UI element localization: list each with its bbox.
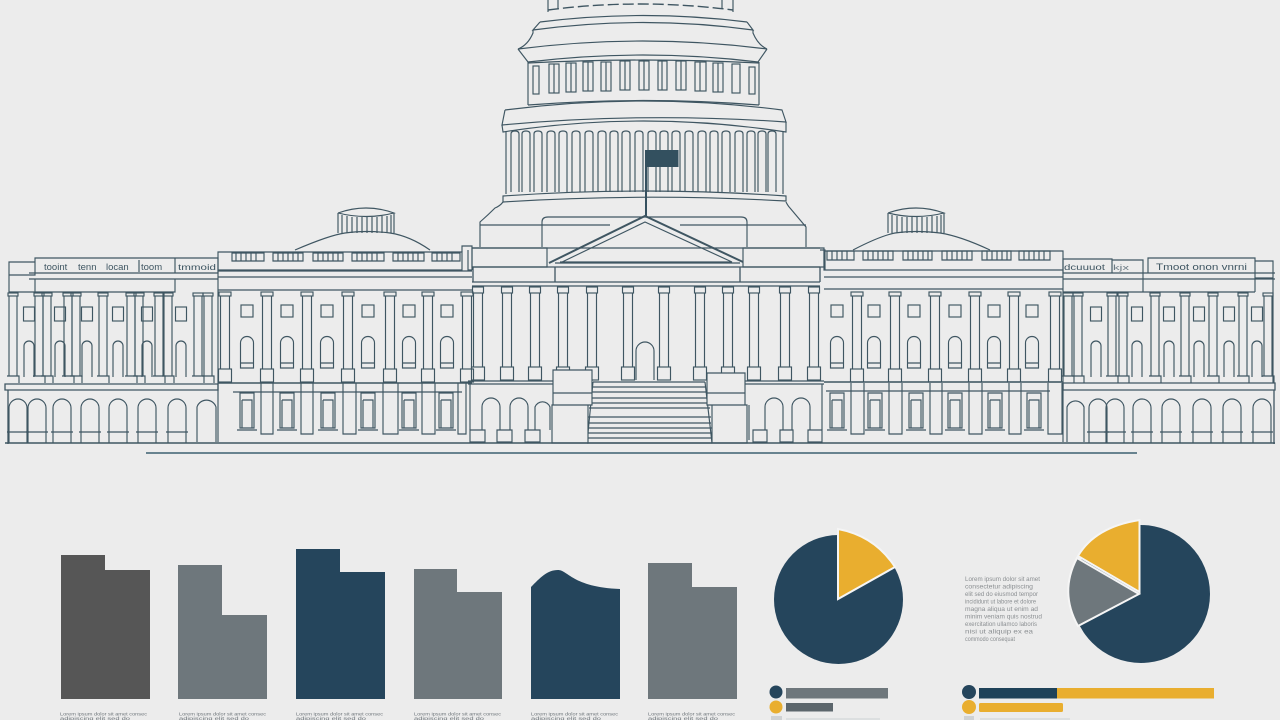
lower arches beside stairs [470, 384, 822, 442]
caption 5: Lorem ipsum dolor sit amet consec [531, 712, 619, 716]
legend row 1 [962, 685, 1214, 699]
grey slice [1068, 558, 1139, 626]
bar chart [61, 549, 737, 699]
caption 6: Lorem ipsum dolor sit amet consec [648, 712, 736, 716]
gold slice [1078, 520, 1140, 592]
dome upper tiers [518, 22, 767, 105]
right wing side inscription: dcuuuot [1064, 262, 1106, 272]
legend row 1 [770, 686, 888, 698]
right centre wing [824, 251, 1063, 442]
right pie chart [1068, 520, 1210, 663]
legend row 2 [770, 700, 833, 714]
left wing [5, 258, 218, 444]
bar 1 [61, 555, 150, 699]
left wing inscription: tooint [44, 262, 68, 273]
right wing [1062, 258, 1275, 444]
caption 3: Lorem ipsum dolor sit amet consec [296, 712, 384, 716]
dome colonnade [502, 100, 786, 194]
legend row 2 [962, 700, 1063, 714]
line 8: nisi ut aliquip ex ea [965, 630, 1034, 636]
right dome [853, 208, 990, 250]
left wing side inscription: tmmoid [178, 262, 216, 272]
line 6: minim veniam quis nostrud [965, 614, 1042, 620]
flag [646, 150, 678, 216]
left centre wing [218, 246, 474, 442]
right wing inscription: Tmoot onon vnrni [1156, 262, 1247, 272]
bar 3 [296, 549, 385, 699]
stairs [552, 370, 747, 443]
navy disc [774, 535, 903, 664]
left wing inscription: toom [141, 262, 162, 273]
caption 2: Lorem ipsum dolor sit amet consec [179, 712, 267, 716]
dome base [472, 191, 820, 248]
left legend [770, 686, 888, 720]
bar 4 [414, 569, 502, 699]
line 1: Lorem ipsum dolor sit amet [965, 577, 1040, 583]
left wing inscription: tenn [78, 262, 96, 273]
illustration: capitol building [5, 0, 1275, 453]
legend row 3 [771, 716, 880, 720]
gold slice [838, 529, 895, 599]
central portico [468, 216, 825, 384]
left wing inscription: locan [106, 262, 129, 273]
building base lines [5, 443, 1275, 453]
bar 2 [178, 565, 267, 699]
legend row 3 [964, 716, 1070, 720]
line 3: elit sed do eiusmod tempor [965, 592, 1038, 598]
bar 5 [531, 570, 620, 699]
line 7: exercitation ullamco laboris [965, 622, 1037, 628]
dome drum windows [533, 61, 755, 94]
left dome [295, 208, 430, 250]
caption 1: Lorem ipsum dolor sit amet consec [60, 712, 148, 716]
right wing small inscription: kjx [1113, 265, 1130, 272]
line 9: commodo consequat [965, 637, 1015, 643]
bar captions [60, 712, 736, 720]
centre text block [965, 577, 1042, 643]
line 4: incididunt ut labore et dolore [965, 600, 1037, 606]
line 2: consectetur adipiscing [965, 584, 1033, 590]
right legend [962, 685, 1214, 720]
navy disc [1072, 525, 1210, 663]
line 5: magna aliqua ut enim ad [965, 607, 1038, 613]
dome lantern [540, 0, 747, 22]
left pie chart [774, 529, 903, 664]
bar 6 [648, 563, 737, 699]
caption 4: Lorem ipsum dolor sit amet consec [414, 712, 502, 716]
